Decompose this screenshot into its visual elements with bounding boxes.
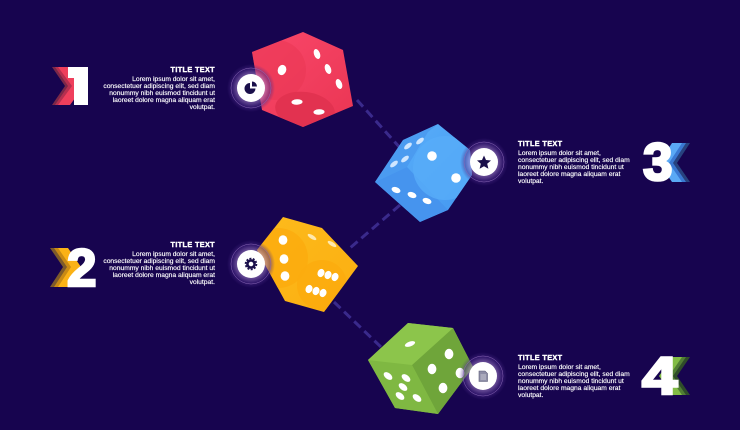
step 1 number — [52, 67, 88, 105]
step 2 number — [50, 239, 96, 298]
yellow die — [248, 217, 358, 312]
step 3 text: laoreet dolore magna aliquam erat — [518, 171, 620, 178]
connector: red die to blue die — [357, 100, 402, 150]
step 1 text: volutpat. — [190, 104, 215, 111]
step 2 text: nonummy nibh euismod tincidunt ut — [109, 265, 215, 272]
step 4 text: TITLE TEXT — [518, 353, 563, 362]
step 2 text: volutpat. — [190, 279, 215, 286]
step 4 text — [518, 353, 630, 399]
step 3 text: TITLE TEXT — [518, 139, 563, 148]
step 1 text: consectetuer adipiscing elit, sed diam — [103, 83, 215, 90]
blue die — [375, 124, 477, 222]
step 3 text: Lorem ipsum dolor sit amet, — [518, 150, 601, 157]
step 1 number: 1 — [62, 56, 92, 116]
step 3 text: volutpat. — [518, 178, 544, 185]
step 2 text: consectetuer adipiscing elit, sed diam — [103, 258, 215, 265]
icon badge: document — [459, 352, 507, 400]
step 2 number: 2 — [67, 239, 96, 298]
icon badge: star — [460, 138, 508, 186]
step 3 text: consectetuer adipiscing elit, sed diam — [518, 157, 630, 164]
connector: yellow die to green die — [334, 302, 382, 348]
step 3 text — [518, 139, 630, 185]
step 4 number: 4 — [642, 347, 678, 406]
icon badge: gear — [227, 240, 275, 288]
step 2 text: Lorem ipsum dolor sit amet, — [132, 251, 215, 258]
step 2 text: TITLE TEXT — [171, 240, 215, 249]
step 4 text: laoreet dolore magna aliquam erat — [518, 385, 620, 392]
step 3 number: 3 — [643, 133, 672, 192]
red die — [252, 32, 353, 127]
step 4 text: consectetuer adipiscing elit, sed diam — [518, 371, 630, 378]
step 4 text: nonummy nibh euismod tincidunt ut — [518, 378, 624, 385]
step 2 text: laoreet dolore magna aliquam erat — [113, 272, 215, 279]
step 1 text — [103, 65, 215, 111]
step 1 text: nonummy nibh euismod tincidunt ut — [109, 90, 215, 97]
step 3 text: nonummy nibh euismod tincidunt ut — [518, 164, 624, 171]
icon badge: pie chart — [227, 64, 275, 112]
step 1 text: TITLE TEXT — [171, 65, 215, 74]
step 1 text: laoreet dolore magna aliquam erat — [113, 97, 215, 104]
step 4 text: volutpat. — [518, 392, 544, 399]
step 2 text — [103, 240, 215, 286]
green die — [368, 323, 473, 414]
step 1 text: Lorem ipsum dolor sit amet, — [132, 76, 215, 83]
step 3 number — [643, 133, 690, 192]
step 4 text: Lorem ipsum dolor sit amet, — [518, 364, 601, 371]
connector: blue die to yellow die — [350, 205, 400, 248]
